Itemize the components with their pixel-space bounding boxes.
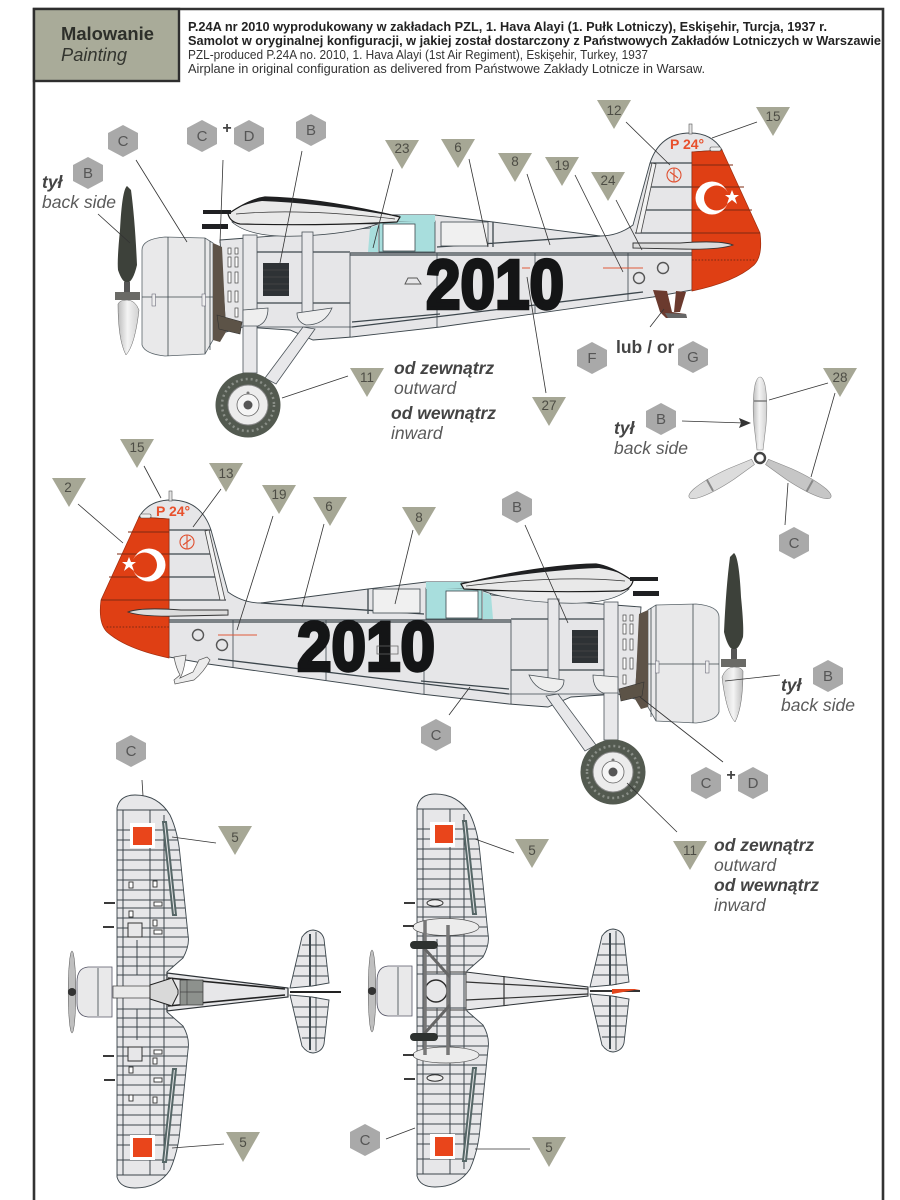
aircraft: underside view [368,794,640,1187]
description text block [188,20,881,76]
decal keys: triangles: 8 [511,154,519,169]
decal keys: triangles: 8 [415,510,423,525]
annotation: outward and inward, second profile [714,835,819,915]
decal keys: triangles: 6 [454,140,462,155]
decal keys: triangles: 28 [832,370,848,385]
decal keys: triangles: 5 [231,830,239,845]
description text block: Samolot w oryginalnej konfiguracji, w jakiej został dostarczony z Państwowych Zakładów Lotniczych w Warszawie [188,34,881,48]
decal keys: triangles: 2 [64,480,72,495]
decal keys: triangles: 5 [528,843,536,858]
decal keys: triangles: 11 [360,370,374,385]
decal keys: triangles: 27 [541,398,557,413]
annotation: lub / or: lub / or [616,337,675,357]
colour keys: hexagons: B [306,122,316,139]
colour keys: hexagons: F [587,350,597,367]
aircraft: left side profile: 2010 [426,246,564,324]
colour keys: hexagons: C [360,1132,371,1149]
annotation: back side, second profile: tył [781,675,803,695]
heading panel: Malowanie / Painting: Malowanie [61,23,154,44]
colour keys: hexagons: B [83,165,93,182]
colour keys: hexagons: B [512,499,522,516]
aircraft: left side profile: P 24° [670,136,704,152]
annotation: outward and inward, second profile: od zewnątrz [714,835,814,855]
description text block: Airplane in original configuration as delivered from Państwowe Zakłady Lotnicze in Warsaw. [188,62,705,76]
description text block: P.24A nr 2010 wyprodukowany w zakładach PZL, 1. Hava Alayi (1. Pułk Lotniczy), Eskişehir, Turcja, 1937 r. [188,20,827,34]
decal keys: triangles: 13 [218,466,234,481]
colour keys: hexagons: C [126,743,137,760]
annotation: back side, second profile: back side [781,695,855,715]
annotation: back side, second profile [781,675,855,715]
colour keys: hexagons: C [197,128,208,145]
decal keys: triangles [52,100,857,1167]
annotation: outward and inward, second profile: outward [714,855,778,875]
annotation: outward and inward, second profile: inward [714,895,767,915]
aircraft: left side profile [115,124,761,438]
annotation: back side, top left: back side [42,192,116,212]
colour keys: hexagons: G [687,349,699,366]
annotation: outward and inward, first profile: od zewnątrz [394,358,494,378]
decal keys: triangles: 11 [683,843,697,858]
decal keys: triangles: 15 [129,440,145,455]
colour keys: hexagons: B [823,668,833,685]
colour keys: hexagons: B [656,411,666,428]
heading panel: Malowanie / Painting [34,9,179,81]
decal keys: triangles: 24 [600,173,616,188]
colour keys: hexagons: D [748,775,759,792]
heading panel: Malowanie / Painting: Painting [61,44,127,65]
colour keys: hexagons: D [244,128,255,145]
three-blade propeller, back side [686,377,834,503]
annotation: back side, propeller: tył [614,418,636,438]
decal keys: triangles: 19 [271,487,287,502]
annotation: back side, top left [42,172,116,212]
aircraft: right side profile: P 24° [156,503,190,519]
decal keys: triangles: 15 [765,109,781,124]
colour keys: hexagons: C [431,727,442,744]
decal keys: triangles: 5 [545,1140,553,1155]
colour keys: hexagons: + [222,120,232,137]
annotation: outward and inward, first profile: outward [394,378,458,398]
decal keys: triangles: 6 [325,499,333,514]
colour keys: hexagons: C [789,535,800,552]
callout lines and arrow [78,122,835,1149]
annotation: back side, propeller [614,418,688,458]
colour keys: hexagons: C [701,775,712,792]
annotation: outward and inward, second profile: od wewnątrz [714,875,819,895]
colour keys: hexagons: C [118,133,129,150]
annotation: outward and inward, first profile: od wewnątrz [391,403,496,423]
annotation: back side, propeller: back side [614,438,688,458]
aircraft: right side profile [100,491,746,804]
description text block: PZL-produced P.24A no. 2010, 1. Hava Alayi (1st Air Regiment), Eskişehir, Turkey, 1937 [188,48,648,62]
aircraft: right side profile: 2010 [297,608,435,686]
annotation: outward and inward, first profile [391,358,496,443]
annotation: back side, top left: tył [42,172,64,192]
annotation: outward and inward, first profile: inward [391,423,444,443]
decal keys: triangles: 12 [606,103,622,118]
colour keys: hexagons [73,114,843,1156]
aircraft: top view [68,795,341,1188]
decal keys: triangles: 19 [554,158,570,173]
decal keys: triangles: 23 [394,141,410,156]
decal keys: triangles: 5 [239,1135,247,1150]
colour keys: hexagons: + [726,767,736,784]
